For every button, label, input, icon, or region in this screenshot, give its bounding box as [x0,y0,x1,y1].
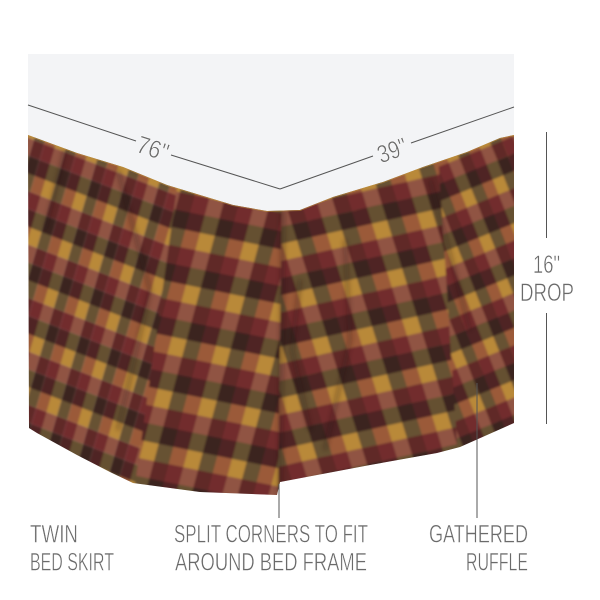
label: split corners [174,520,368,576]
label: 16 inch drop: 16" [533,251,560,279]
label: split corners: SPLIT CORNERS TO FIT [174,520,368,548]
label: twin bed skirt [30,520,114,576]
dimension line: drop [546,132,548,424]
label: twin bed skirt: BED SKIRT [30,548,114,576]
fabric skirt [28,135,514,495]
label: gathered ruffle: RUFFLE [466,548,528,576]
background panel [28,54,514,224]
label: split corners: AROUND BED FRAME [175,548,367,576]
dimension line: 76 inch width: 76" [133,131,172,167]
label: twin bed skirt: TWIN [30,520,78,548]
dimension line: 39 inch width: 39" [373,133,411,169]
dimension line: 76 inch width [28,105,280,189]
label: gathered ruffle: GATHERED [429,520,528,548]
pointer: split corners [278,484,280,518]
pointer: gathered ruffle [476,383,478,518]
dimension line: 39 inch width [280,107,514,189]
label: 16 inch drop: DROP [520,279,574,307]
bed skirt infographic [28,54,573,570]
label: gathered ruffle [429,520,528,576]
label: 16 inch drop [520,251,574,307]
